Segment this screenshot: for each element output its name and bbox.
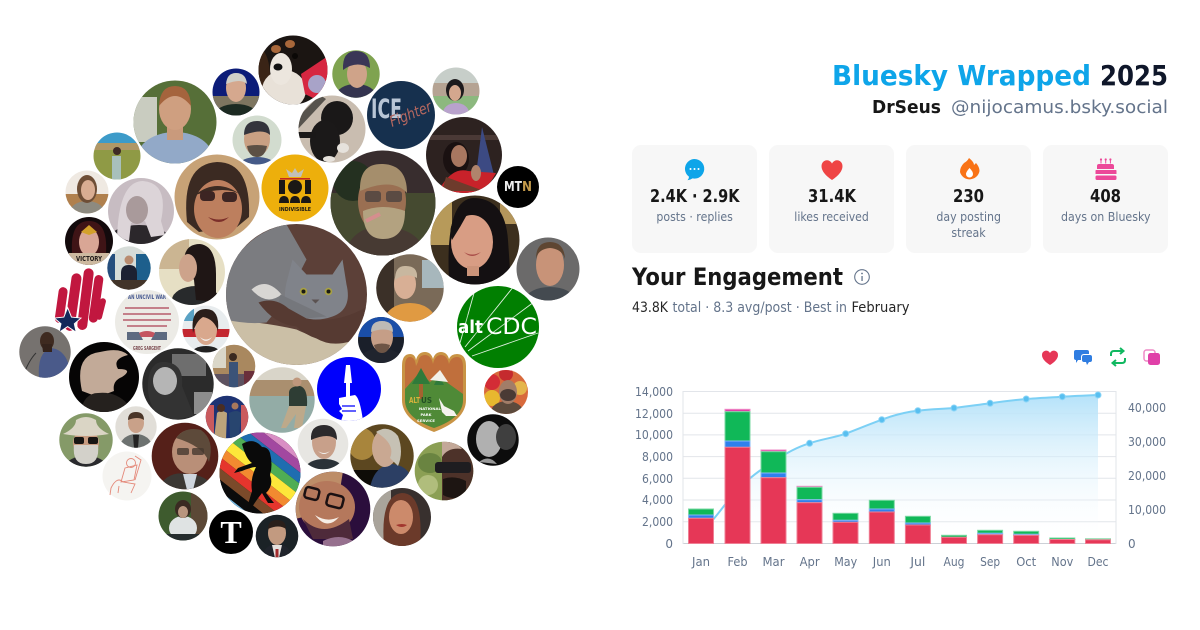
panel: posts and replies: 2.4K · 2.9K [650,186,740,207]
month labels [691,555,1108,569]
right axis labels: 0 [1128,537,1136,551]
avatar: speaker with microphone [19,326,71,378]
bar: Jan [688,509,714,544]
avatar: man with glasses on TV [151,422,219,490]
icon: likes legend [1042,351,1058,365]
avatar: ICE Fighter logo: Fighter [387,97,435,131]
avatar: woman in living room [212,344,256,388]
icon: reposts legend [1111,348,1125,366]
panel: days on Bluesky: 408 [1090,186,1121,207]
month labels: Sep [980,555,1000,569]
panel: posts and replies: posts · replies [656,209,733,224]
left axis labels [635,385,673,551]
left axis labels: 4,000 [642,493,673,507]
user name and handle: DrSeus [872,97,941,118]
icon: info [855,270,869,284]
month labels: Oct [1016,555,1036,569]
line: cumulative engagement [701,395,1098,532]
avatar: woman with union flag [182,306,230,352]
avatar: book cover An Uncivil War [115,290,179,354]
stacked bars [688,409,1110,544]
right axis labels [1128,401,1166,551]
panel: day posting streak [906,145,1031,253]
left axis labels: 8,000 [642,450,673,464]
avatar: book cover An Uncivil War: AN UNCIVIL WAR [128,293,166,301]
badge: Alt US National Park Service: PARK [420,412,433,417]
avatar: woman in field [93,132,141,180]
left axis labels: 12,000 [635,407,673,421]
panel: day posting streak: 230 [953,186,984,207]
avatar: smiling man on blue [212,68,260,116]
area: cumulative engagement [701,395,1098,544]
avatar: Indivisible logo [261,154,329,222]
panel: day posting streak: day posting [936,209,1001,224]
avatar: man in grey suit [115,406,157,448]
month labels: Jan [691,555,710,569]
month labels: Nov [1051,555,1073,569]
avatar: smiling man with dark hair [297,418,349,477]
icon: quotes legend [1144,350,1160,365]
avatar: woman in black and white [142,348,214,422]
icon: chat bubble [685,159,704,180]
bar: Oct [1014,531,1039,544]
badge: Alt US National Park Service [402,352,466,432]
bar: May [833,513,858,544]
month labels: Feb [728,555,748,569]
avatar: man with mask on flower wall [484,367,528,423]
right axis labels: 40,000 [1128,401,1166,415]
avatar: Wonder Woman: VICTORY [76,255,103,263]
avatar: book cover An Uncivil War: GREG SARGENT [133,346,161,352]
right axis labels: 20,000 [1128,469,1166,483]
avatar: speaker at flag podium [426,117,502,193]
right axis labels: 30,000 [1128,435,1166,449]
avatar: rainbow flag silhouette [220,432,300,514]
avatar: Wonder Woman [65,217,113,265]
left axis labels: 0 [665,537,673,551]
engagement summary: February [852,300,910,316]
month labels: Mar [762,555,785,569]
avatar: bald man on grey [516,238,580,300]
month labels: Aug [944,555,964,569]
avatar: New York Times T [209,510,253,554]
avatar: smiling woman with black hair [430,195,520,285]
right axis labels: 10,000 [1128,503,1166,517]
badge: Alt US National Park Service: US [421,396,432,405]
avatar: MTN logo [497,166,539,208]
bar: Aug [942,535,966,544]
month labels: May [834,555,857,569]
user name and handle: @nijocamus.bsky.social [951,97,1168,118]
avatar: blue circle with hand and pen [317,357,381,421]
heading: Your Engagement: Your Engagement [631,263,843,291]
icon: replies legend [1074,350,1092,365]
bar: Apr [797,486,822,544]
avatar: black curly dog [298,95,366,163]
avatar: MTN logo: N [522,180,532,195]
avatar: woman among plants [158,491,208,542]
avatar: two women shaking hands [205,395,249,439]
line markers [807,392,1101,446]
avatar: woman with dark hair in profile [159,239,225,305]
avatar: grey cat [226,224,368,366]
avatar: ICE Fighter logo: ICE [371,94,402,125]
avatar: woman on a field [432,68,480,114]
avatar: Indivisible logo: INDIVISIBLE [279,207,311,213]
panel: likes received: likes received [794,209,869,224]
month labels: Apr [800,555,820,569]
bar: Nov [1050,538,1075,544]
avatar: man at press podium [107,246,151,290]
month labels: Jul [909,555,925,569]
avatar: laughing man with glasses [295,471,371,547]
avatar: red line sketch [102,452,152,500]
avatar: man with white cowboy hat [59,413,113,467]
avatar: New York Times T: T [220,514,242,550]
bar: Jun [869,500,894,544]
avatar: altCDC logo: CDC [486,315,537,340]
panel: days on Bluesky [1043,145,1168,253]
avatar: bearded man [232,116,282,164]
icon: cake [1096,158,1116,180]
avatar: man on blue backdrop [358,317,404,363]
avatar: ICE Fighter logo [367,81,435,149]
bar: Feb [725,409,750,544]
legend icons [1042,348,1160,366]
title: Bluesky Wrapped [832,59,1091,92]
bar: Dec [1086,539,1110,544]
icon: heart [821,160,843,180]
avatar: red-haired woman [373,488,431,546]
avatar: man with red hair [134,80,216,164]
avatar: man with sunglasses and foliage [414,441,474,501]
engagement summary: total · 8.3 avg/post · Best in [672,300,847,316]
avatar: man in suit, dark background [255,514,299,558]
avatar: blonde woman black and white [108,178,174,244]
combo chart: monthly engagement [635,385,1166,569]
bar: Sep [978,530,1003,544]
badge: Alt US National Park Service: SERVICE [417,418,435,423]
month labels: Dec [1088,555,1108,569]
icon: flame [960,158,980,179]
bar: Mar [761,450,786,544]
avatar: red hand logo [54,268,107,332]
panel: days on Bluesky: days on Bluesky [1061,209,1151,224]
left axis labels: 10,000 [635,428,673,442]
badge: Alt US National Park Service: ALT [409,396,421,405]
avatar: blonde woman in orange [376,254,444,322]
avatar: spaniel dog [258,35,328,110]
panel: day posting streak: streak [951,225,986,240]
avatar: woman in headscarf [332,50,380,98]
left axis labels: 2,000 [642,515,673,529]
left axis labels: 14,000 [635,385,673,399]
avatar: man with cigar [330,150,436,256]
avatar: woman in black and white on black [467,414,519,466]
avatar: altCDC logo [457,286,539,368]
title: 2025 [1100,59,1168,92]
panel: likes received: 31.4K [808,186,857,207]
avatar: MTN logo: MT [504,180,522,195]
avatar: woman with teal earrings [66,170,108,214]
avatar: woman with glasses closeup [174,154,260,240]
avatar bubble cloud [19,35,580,558]
avatar: man at riverside buildings [249,367,315,433]
avatar: older woman speaking [348,424,414,490]
engagement summary: 43.8K [632,300,669,316]
month labels: Jun [872,555,891,569]
bar: Jul [905,516,930,544]
avatar: windblown hair [69,342,139,413]
panel: posts and replies [632,145,757,253]
badge: Alt US National Park Service: NATIONAL [419,406,442,411]
avatar: altCDC logo: alt [458,317,483,338]
left axis labels: 6,000 [642,472,673,486]
panel: likes received [769,145,894,253]
